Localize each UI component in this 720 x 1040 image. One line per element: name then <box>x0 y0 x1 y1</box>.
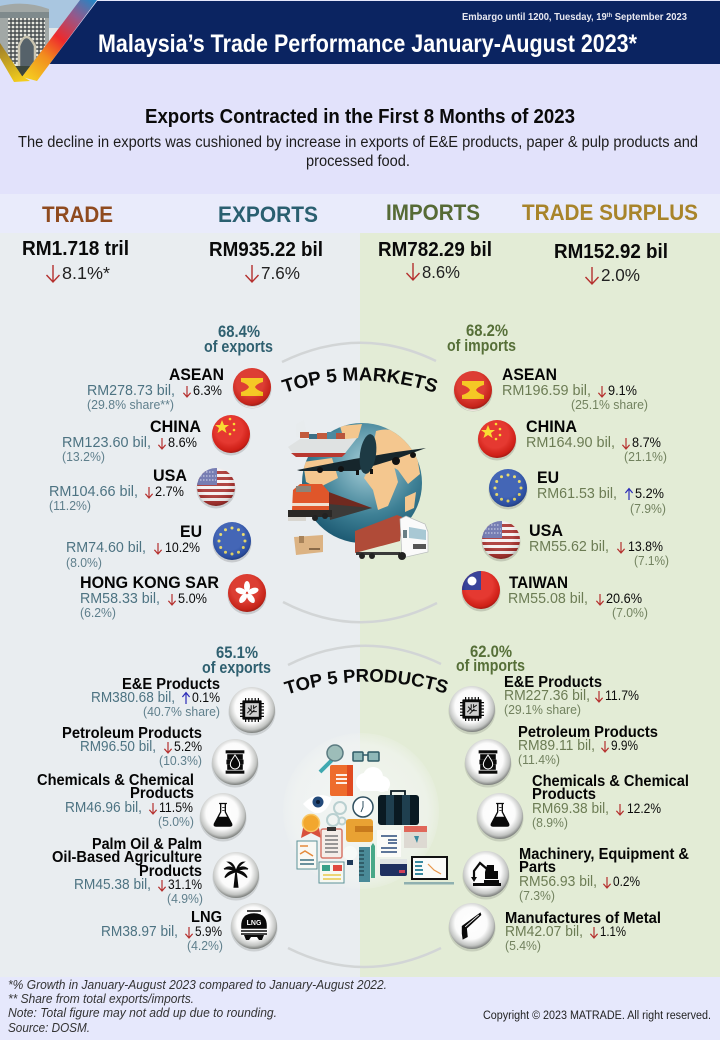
icon: LNG tank: LNG <box>247 920 262 927</box>
export market: EU: EU <box>180 523 202 541</box>
stat: trade: RM1.718 tril <box>22 238 129 260</box>
export product: chemicals: Products <box>130 785 194 802</box>
export market: USA: RM104.66 bil, <box>49 484 138 500</box>
share callout: 68.2% of imports <box>447 322 516 355</box>
stat: trade: TRADE <box>42 202 113 227</box>
flag: EU <box>488 469 528 510</box>
stat: trade surplus <box>522 200 698 285</box>
export market: USA <box>49 467 236 513</box>
export market: EU: 10.2% <box>165 540 200 555</box>
flag: EU <box>212 522 252 562</box>
export market: ASEAN: 6.3% <box>193 383 222 398</box>
main title: Malaysia’s Trade Performance January-August 2023* <box>98 30 637 58</box>
box <box>294 535 323 555</box>
import product: machinery: RM56.93 bil, <box>519 874 597 890</box>
export market: Hong Kong SAR <box>80 574 266 620</box>
import market: EU <box>488 469 666 516</box>
export market: EU <box>66 522 252 570</box>
export market: ASEAN <box>87 366 272 412</box>
import product: E&E: RM227.36 bil, <box>504 688 590 704</box>
share callout: 62.0% of imports: 62.0% <box>470 643 512 661</box>
export product: E&E: RM380.68 bil, <box>91 690 175 706</box>
illustration: globe and freight transport <box>288 420 428 560</box>
import market: Taiwan: TAIWAN <box>509 574 568 592</box>
import market: USA: USA <box>529 522 563 540</box>
embargo note: th <box>607 13 612 19</box>
share callout: 62.0% of imports <box>456 643 525 675</box>
import market: ASEAN: (25.1% share) <box>571 397 648 412</box>
import product: petroleum <box>464 724 658 788</box>
import market: ASEAN: ASEAN <box>502 366 557 384</box>
import market: China <box>478 418 667 464</box>
stat: exports: 7.6% <box>261 263 300 283</box>
icon: flask <box>476 793 524 842</box>
share callout: 68.2% of imports: of imports <box>447 337 516 355</box>
import market: USA <box>482 521 669 568</box>
export product: petroleum: 5.2% <box>174 739 202 754</box>
icon: excavator <box>462 851 510 900</box>
share callout: 62.0% of imports: of imports <box>456 657 525 675</box>
intro: heading and description: processed food. <box>306 153 410 170</box>
export product: chemicals: RM46.96 bil, <box>65 800 142 816</box>
import product: machinery: Parts <box>519 859 556 876</box>
footnotes <box>8 977 387 1035</box>
flag: China <box>212 415 250 456</box>
import product: petroleum: Petroleum Products <box>518 724 658 741</box>
import product: E&E <box>448 674 639 734</box>
ruler and pencil <box>359 843 375 882</box>
flag: China <box>478 420 516 460</box>
share callout: 65.1% of exports: 65.1% <box>216 644 258 662</box>
export market: USA: (11.2%) <box>49 498 91 513</box>
export market: China: RM123.60 bil, <box>62 435 151 451</box>
medal <box>301 814 321 838</box>
import market: China: RM164.90 bil, <box>526 435 615 451</box>
export market: USA: USA <box>153 467 187 485</box>
stat: trade surplus: 2.0% <box>601 265 640 285</box>
section: top 5 markets heading with arcs <box>281 342 438 624</box>
share callout: 68.4% of exports <box>204 323 273 356</box>
share callout: 68.4% of exports: of exports <box>204 338 273 356</box>
wallet <box>346 819 373 842</box>
calendar <box>404 826 427 848</box>
export market: USA: 2.7% <box>155 484 184 499</box>
import market: Taiwan: (7.0%) <box>612 605 648 620</box>
stat: exports <box>209 202 323 283</box>
briefcase <box>378 791 419 825</box>
plane <box>297 433 426 475</box>
import product: petroleum: (11.4%) <box>518 752 560 767</box>
export product: palm oil: 31.1% <box>168 877 202 892</box>
icon: oil barrel <box>212 739 258 788</box>
footnotes: *% Growth in January-August 2023 compared to January-August 2022. <box>8 977 387 992</box>
share callout: 68.2% of imports: 68.2% <box>466 322 508 340</box>
export market: Hong Kong SAR: RM58.33 bil, <box>80 591 160 607</box>
import market: ASEAN <box>454 366 648 412</box>
stat: imports: 8.6% <box>422 262 460 282</box>
import product: manufactures of metal: 1.1% <box>600 924 626 939</box>
import product: E&E: 11.7% <box>605 688 639 703</box>
section: top 5 markets heading with arcs: TOP 5 MARKETS <box>281 367 438 392</box>
icon: chip <box>228 687 276 736</box>
share callout: 65.1% of exports <box>202 644 271 677</box>
header banner <box>0 0 720 85</box>
document bottom <box>319 862 344 883</box>
flag: USA <box>482 521 520 562</box>
icon: chip <box>448 686 496 734</box>
export product: palm oil: (4.9%) <box>167 891 203 906</box>
document right <box>377 830 401 857</box>
import market: Taiwan: 20.6% <box>606 591 642 606</box>
import product: machinery: (7.3%) <box>519 888 555 903</box>
footnotes: ** Share from total exports/imports. <box>8 991 194 1006</box>
train <box>288 484 372 521</box>
flag: Hong Kong <box>228 574 266 614</box>
import market: USA: RM55.62 bil, <box>529 539 609 555</box>
ship <box>288 420 357 457</box>
laptop <box>404 856 454 884</box>
import product: machinery: Machinery, Equipment & <box>519 846 689 863</box>
light bulb <box>343 846 357 865</box>
import product: E&E: E&E Products <box>504 674 602 691</box>
import market: USA: (7.1%) <box>634 553 669 568</box>
import product: machinery: 0.2% <box>613 874 640 889</box>
embargo note: September 2023 <box>612 12 687 23</box>
icon: palm tree <box>212 852 260 900</box>
import product: chemicals: 12.2% <box>627 801 661 816</box>
import market: EU: EU <box>537 469 559 487</box>
import product: manufactures of metal: RM42.07 bil, <box>505 924 583 940</box>
export product: E&E: (40.7% share) <box>143 704 220 719</box>
import product: petroleum: RM89.11 bil, <box>518 738 595 754</box>
footnotes: Note: Total figure may not add up due to rounding. <box>8 1005 277 1020</box>
footnotes: Source: DOSM. <box>8 1020 90 1035</box>
logo: V mark with building photo <box>0 0 98 85</box>
clock <box>353 797 373 817</box>
truck <box>355 515 428 560</box>
export product: chemicals: Chemicals & Chemical <box>37 772 194 789</box>
import product: manufactures of metal: Manufactures of Metal <box>505 910 661 927</box>
illustration: business items in pale circle <box>283 733 454 889</box>
flag: USA <box>196 468 236 508</box>
export market: China: CHINA <box>150 418 201 436</box>
export product: LNG: (4.2%) <box>187 938 223 953</box>
icon: LNG tank <box>230 903 278 952</box>
import product: chemicals: (8.9%) <box>532 815 568 830</box>
export product: petroleum <box>62 725 258 788</box>
stat: exports: RM935.22 bil <box>209 239 323 261</box>
embargo note: Embargo until 1200, Tuesday, 19 <box>462 12 616 23</box>
import product: petroleum: 9.9% <box>611 738 638 753</box>
icon: metal beam <box>449 903 495 951</box>
export product: palm oil: Palm Oil & Palm <box>92 836 202 853</box>
import product: E&E: (29.1% share) <box>504 702 581 717</box>
import market: USA: 13.8% <box>628 539 663 554</box>
export product: LNG: LNG <box>191 909 222 926</box>
export product: palm oil: Oil-Based Agriculture <box>52 849 202 866</box>
stat: imports: IMPORTS <box>386 200 480 225</box>
import market: Taiwan <box>462 571 648 620</box>
export product: E&E: E&E Products <box>122 676 220 693</box>
import market: China: (21.1%) <box>624 449 667 464</box>
credit card <box>380 859 407 876</box>
glasses <box>353 752 379 761</box>
intro: heading and description: Exports Contracted in the First 8 Months of 2023 <box>145 105 575 128</box>
stat: trade <box>22 202 129 283</box>
import product: chemicals: Chemicals & Chemical <box>532 773 689 790</box>
copyright: Copyright © 2023 MATRADE. All right reserved. <box>483 1010 711 1022</box>
import market: China: CHINA <box>526 418 577 436</box>
export product: chemicals: 11.5% <box>159 800 193 815</box>
import market: ASEAN: 9.1% <box>608 383 637 398</box>
flag: ASEAN <box>454 371 492 412</box>
export product: E&E: 0.1% <box>192 690 220 705</box>
export market: China <box>62 415 250 464</box>
export product: palm oil <box>52 836 260 906</box>
export market: Hong Kong SAR: (6.2%) <box>80 605 116 620</box>
export product: E&E <box>91 676 276 736</box>
section: top 5 products heading with arcs: TOP 5 PRODUCTS <box>284 669 448 694</box>
stat: trade surplus: TRADE SURPLUS <box>522 200 698 225</box>
intro: heading and description <box>18 105 698 170</box>
share callout: 68.4% of exports: 68.4% <box>218 323 260 341</box>
export market: EU: RM74.60 bil, <box>66 540 146 556</box>
export product: petroleum: (10.3%) <box>159 753 202 768</box>
export market: ASEAN: ASEAN <box>169 366 224 384</box>
cloud <box>356 767 390 792</box>
eye <box>303 795 332 813</box>
import market: China: 8.7% <box>632 435 661 450</box>
icon: flask <box>200 793 246 842</box>
export product: LNG: RM38.97 bil, <box>101 924 178 940</box>
export product: chemicals: (5.0%) <box>158 814 194 829</box>
section: top 5 products heading with arcs <box>284 644 448 968</box>
export product: palm oil: Products <box>139 863 202 880</box>
import market: EU: (7.9%) <box>630 501 666 516</box>
flag: Taiwan <box>462 571 500 612</box>
stat: imports <box>378 200 492 282</box>
import market: EU: RM61.53 bil, <box>537 486 617 502</box>
export market: ASEAN: RM278.73 bil, <box>87 383 175 399</box>
export product: petroleum: RM96.50 bil, <box>80 739 156 755</box>
import product: machinery <box>462 846 689 903</box>
export market: ASEAN: (29.8% share**) <box>87 397 174 412</box>
export market: EU: (8.0%) <box>66 555 102 570</box>
import product: manufactures of metal <box>449 903 661 953</box>
stat: exports: EXPORTS <box>218 202 318 227</box>
import product: chemicals <box>476 773 689 842</box>
notebook <box>330 765 353 796</box>
clipboard <box>321 827 342 858</box>
import market: ASEAN: RM196.59 bil, <box>502 383 591 399</box>
export product: LNG: 5.9% <box>195 924 222 939</box>
icon: oil barrel <box>464 739 512 788</box>
import market: Taiwan: RM55.08 bil, <box>508 591 588 607</box>
stat: trade surplus: RM152.92 bil <box>554 241 668 263</box>
export market: Hong Kong SAR: 5.0% <box>178 591 207 606</box>
import market: EU: 5.2% <box>635 486 664 501</box>
export market: China: 8.6% <box>168 435 197 450</box>
stat: trade: 8.1%* <box>62 263 110 283</box>
flag: ASEAN <box>232 368 272 408</box>
globe <box>302 423 422 543</box>
export market: Hong Kong SAR: HONG KONG SAR <box>80 574 219 592</box>
import product: manufactures of metal: (5.4%) <box>505 938 541 953</box>
export product: LNG <box>101 903 278 953</box>
import product: chemicals: RM69.38 bil, <box>532 801 609 817</box>
magnifier <box>320 745 343 772</box>
export market: China: (13.2%) <box>62 449 105 464</box>
document left <box>297 841 317 869</box>
export product: petroleum: Petroleum Products <box>62 725 202 742</box>
gears <box>327 802 346 826</box>
intro: heading and description: The decline in exports was cushioned by increase in exports of E&E products, paper & pulp products and <box>18 134 698 151</box>
import product: chemicals: Products <box>532 786 596 803</box>
stat: imports: RM782.29 bil <box>378 239 492 261</box>
share callout: 65.1% of exports: of exports <box>202 659 271 677</box>
export product: chemicals <box>37 772 246 842</box>
export product: palm oil: RM45.38 bil, <box>74 877 151 893</box>
